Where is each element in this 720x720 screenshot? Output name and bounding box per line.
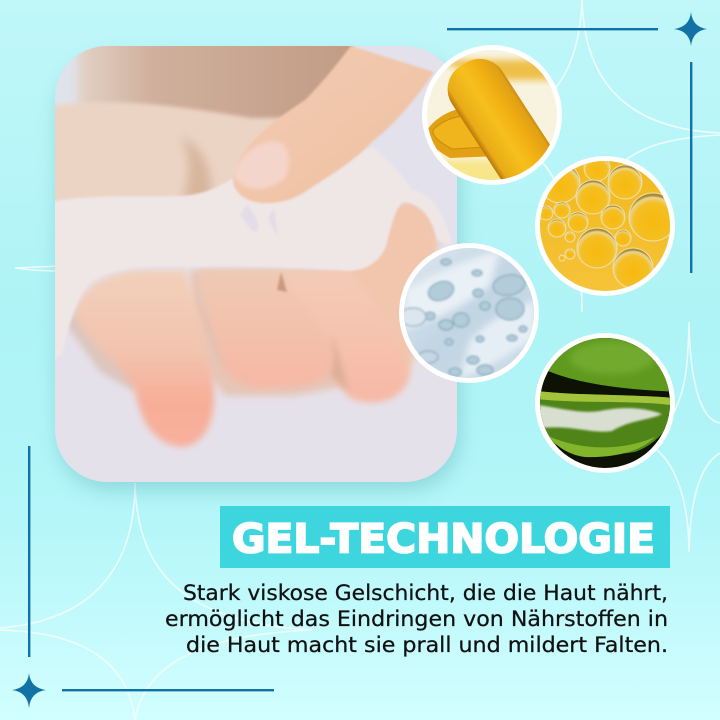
body text: ermöglicht das Eindringen von Nährstoffen in	[165, 607, 668, 631]
palm shadow	[68, 310, 135, 392]
shadow between finger 1 and 2	[190, 285, 224, 372]
gel droplets	[241, 206, 276, 232]
finger 1	[75, 270, 214, 447]
pressing finger	[233, 46, 434, 203]
ingredient circle: golden oil bubbles	[535, 155, 677, 296]
blue corner ornament: top right	[447, 12, 707, 273]
title banner	[220, 506, 670, 568]
photo shadow	[58, 58, 460, 490]
finger 3	[285, 270, 408, 402]
ingredient circle: oil capsule	[422, 45, 562, 185]
white gel sheet	[50, 146, 452, 362]
ingredient circle: aloe vera	[535, 325, 680, 473]
thumb at right	[335, 202, 442, 391]
photo: finger pressing gel sheet on hand	[40, 30, 470, 482]
shadow between fingers	[330, 344, 348, 389]
skin band under sheer pad	[55, 102, 280, 202]
title text: GEL-TECHNOLOGIE	[232, 516, 655, 562]
finger 2	[198, 270, 333, 388]
body text: Stark viskose Gelschicht, die die Haut nährt,	[183, 581, 668, 605]
fingernail	[234, 142, 289, 189]
blue corner ornament: bottom left	[12, 446, 274, 708]
body text: die Haut macht sie prall und mildert Falten.	[186, 633, 668, 657]
photo backdrop	[40, 30, 470, 300]
crease between fingers	[277, 272, 287, 292]
hand base under fingers	[190, 270, 350, 396]
ingredient circle: water droplets	[399, 243, 540, 385]
body text	[165, 581, 668, 657]
